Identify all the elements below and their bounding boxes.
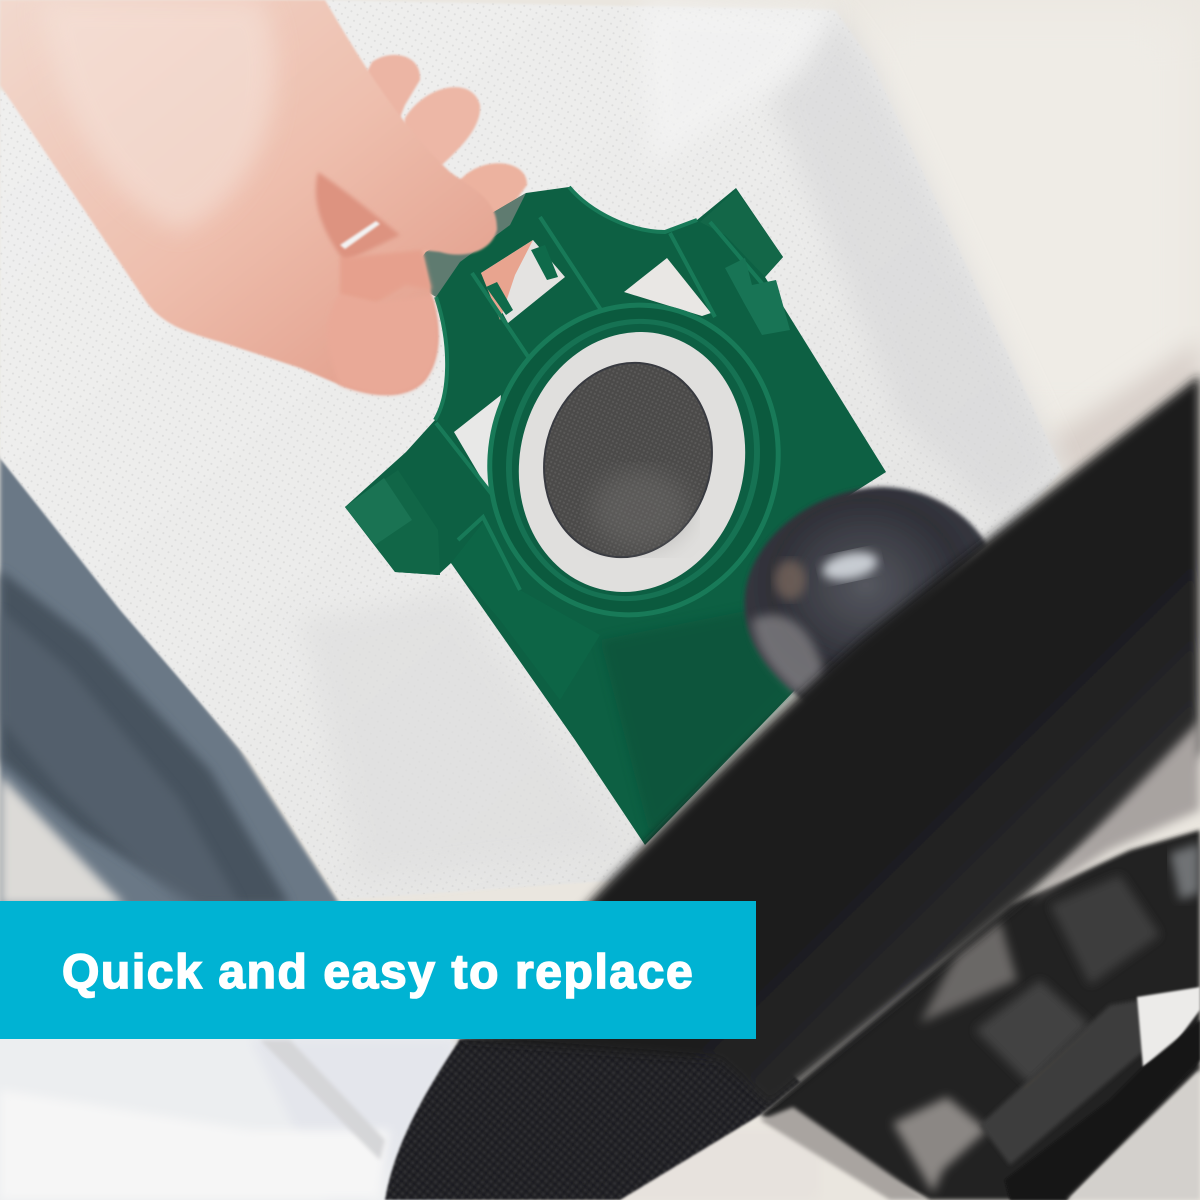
green bag collar plate [345, 187, 886, 845]
black vacuum handle tube [385, 375, 1200, 1200]
dark glossy knob [744, 487, 987, 705]
circular collar rim [454, 271, 814, 649]
white fabric vacuum bag [0, 0, 1062, 900]
banner text: Quick and easy to replace [62, 946, 694, 999]
latch clip [725, 258, 790, 335]
top-right clip block [700, 190, 783, 277]
white rubber seal ring [492, 308, 772, 616]
hand [0, 0, 497, 395]
lower plate [600, 610, 795, 835]
left foot block [345, 470, 440, 575]
vacuum machinery, lower right [760, 830, 1200, 1200]
dark filter opening [523, 344, 733, 576]
collar ribs [435, 187, 776, 590]
collar window openings [454, 240, 711, 493]
fingers behind the plate [350, 55, 527, 270]
grey tab under finger [406, 193, 526, 297]
blue-grey vacuum body at left [0, 455, 340, 905]
banner [0, 901, 756, 1039]
